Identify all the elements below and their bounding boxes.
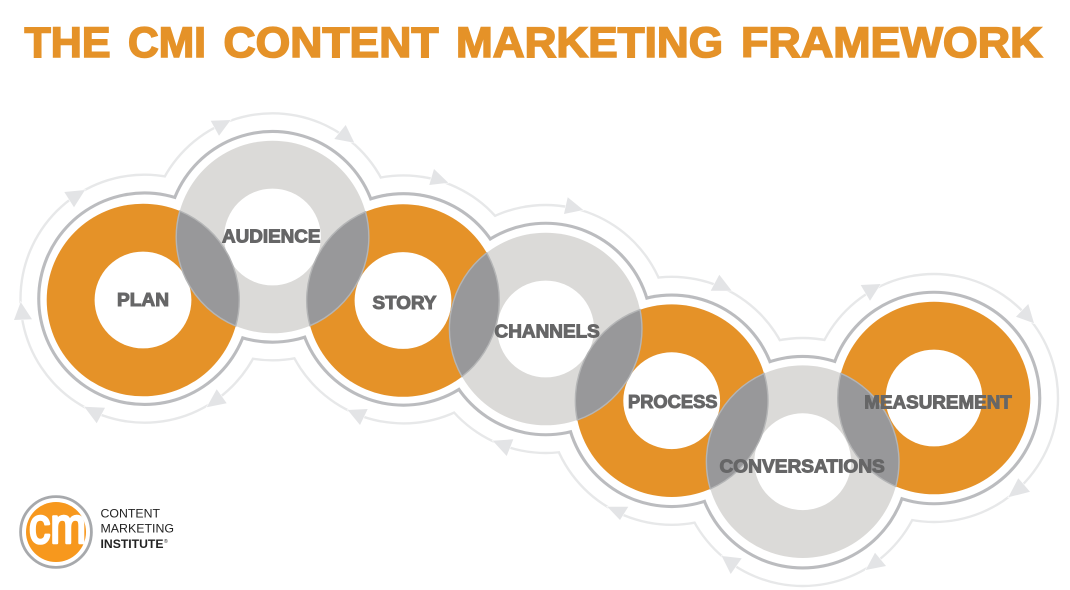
logo badge	[21, 497, 91, 567]
ring: audience	[176, 141, 369, 333]
ring: story	[307, 204, 499, 397]
label: channels: CHANNELS	[494, 320, 600, 341]
label: story: STORY	[372, 292, 437, 313]
ring: plan	[47, 204, 239, 396]
ring: channels	[449, 233, 642, 425]
logo badge: cm	[29, 498, 86, 554]
title: THE	[24, 19, 110, 67]
title: MARKETING	[456, 19, 723, 67]
logo wordmark: MARKETING	[100, 522, 174, 536]
logo wordmark	[100, 507, 174, 551]
logo wordmark: CONTENT	[100, 507, 160, 521]
diagram: linked framework circles	[14, 112, 1059, 587]
label: measurement: MEASUREMENT	[864, 391, 1013, 412]
title: CONTENT	[224, 19, 438, 67]
flow arrowheads	[14, 120, 1034, 574]
title	[24, 19, 1042, 67]
title: FRAMEWORK	[741, 19, 1042, 67]
logo wordmark: INSTITUTE	[100, 537, 164, 551]
grey outline around circles	[37, 130, 1041, 570]
logo wordmark: ®	[164, 538, 168, 545]
ring: process	[575, 304, 768, 497]
overlap lenses	[176, 211, 899, 489]
label: process: PROCESS	[628, 391, 718, 412]
label: plan: PLAN	[117, 289, 169, 310]
centre holes	[95, 189, 982, 510]
label: audience: AUDIENCE	[222, 226, 320, 247]
label: conversations: CONVERSATIONS	[720, 456, 885, 477]
title: CMI	[128, 19, 206, 67]
logo: content marketing institute	[21, 497, 174, 567]
ring: measurement	[838, 302, 1030, 494]
ring: conversations	[706, 365, 899, 558]
outer light flow path	[19, 112, 1059, 587]
